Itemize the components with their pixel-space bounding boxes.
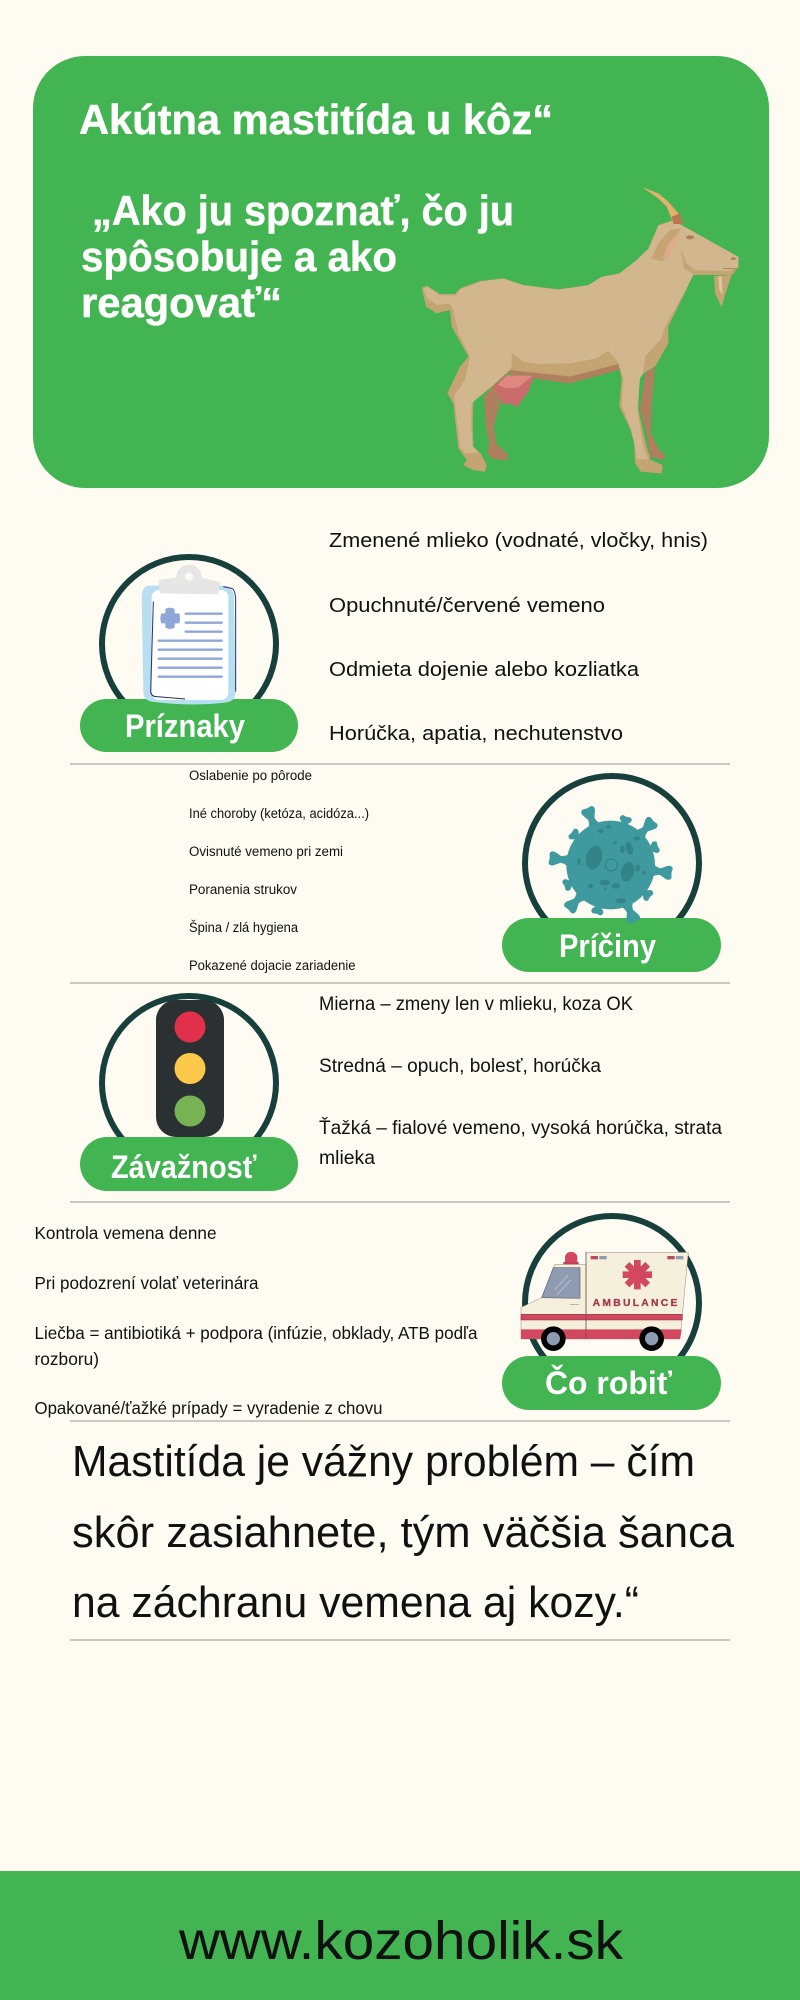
badge: Závažnosť [80, 1137, 298, 1191]
symptoms list: Zmenené mlieko (vodnaté, vločky, hnis) [329, 530, 708, 552]
badge: Čo robiť [502, 1356, 721, 1410]
symptoms list: Odmieta dojenie alebo kozliatka [329, 659, 640, 681]
action list: Opakované/ťažké prípady = vyradenie z chovu [34, 1398, 382, 1418]
severity list [319, 994, 722, 1169]
severity list: Mierna – zmeny len v mlieku, koza OK [319, 994, 633, 1015]
title: reagovať“ [81, 279, 282, 326]
icon: ambulance [521, 1252, 688, 1351]
causes list: Pokazené dojacie zariadenie [189, 958, 356, 973]
action list: Liečba = antibiotiká + podpora (infúzie, obklady, ATB podľa [34, 1323, 478, 1343]
closing statement: skôr zasiahnete, tým väčšia šanca [72, 1508, 735, 1557]
symptoms list: Horúčka, apatia, nechutenstvo [329, 723, 623, 745]
severity list: Ťažká – fialové vemeno, vysoká horúčka, strata [319, 1117, 722, 1139]
icon: goat [422, 187, 738, 473]
icon: clipboard [142, 565, 236, 704]
badge: Príčiny: Príčiny [559, 928, 656, 964]
icon ring: severity [102, 996, 276, 1170]
severity list: Stredná – opuch, bolesť, horúčka [319, 1056, 601, 1077]
footer [0, 1871, 800, 2000]
title: Akútna mastitída u kôz“ [79, 96, 553, 143]
panel: header [33, 56, 769, 488]
badge: Závažnosť: Závažnosť [111, 1149, 257, 1185]
action list: rozboru) [34, 1349, 99, 1369]
badge: Príčiny [502, 918, 721, 972]
action list [34, 1223, 478, 1418]
icon ring: actions [525, 1216, 699, 1390]
causes list: Oslabenie po pôrode [189, 768, 312, 783]
action list: Pri podozrení volať veterinára [34, 1273, 259, 1293]
causes list: Ovisnuté vemeno pri zemi [189, 844, 343, 859]
title: spôsobuje a ako [81, 233, 397, 280]
causes list: Iné choroby (ketóza, acidóza...) [189, 806, 369, 821]
symptoms list [329, 530, 708, 745]
badge: Čo robiť: Čo robiť [545, 1365, 673, 1401]
causes list: Poranenia strukov [189, 882, 297, 897]
closing statement: na záchranu vemena aj kozy.“ [72, 1578, 639, 1627]
badge: Príznaky: Príznaky [125, 708, 245, 744]
causes list [189, 768, 369, 973]
severity list: mlieka [319, 1148, 375, 1169]
badge: Príznaky [80, 699, 298, 752]
closing statement [72, 1437, 735, 1627]
closing statement: Mastitída je vážny problém – čím [72, 1437, 695, 1486]
title: „Ako ju spoznať, čo ju [92, 187, 514, 234]
action list: Kontrola vemena denne [34, 1223, 216, 1243]
causes list: Špina / zlá hygiena [189, 920, 299, 935]
icon: ambulance: AMBULANCE [593, 1298, 677, 1309]
icon ring: symptoms [102, 557, 276, 731]
icon ring: causes [525, 776, 699, 950]
icon: traffic light [156, 1000, 224, 1137]
title [79, 96, 553, 326]
symptoms list: Opuchnuté/červené vemeno [329, 595, 605, 617]
footer: www.kozoholik.sk [178, 1911, 624, 1971]
icon: virus [548, 804, 674, 926]
